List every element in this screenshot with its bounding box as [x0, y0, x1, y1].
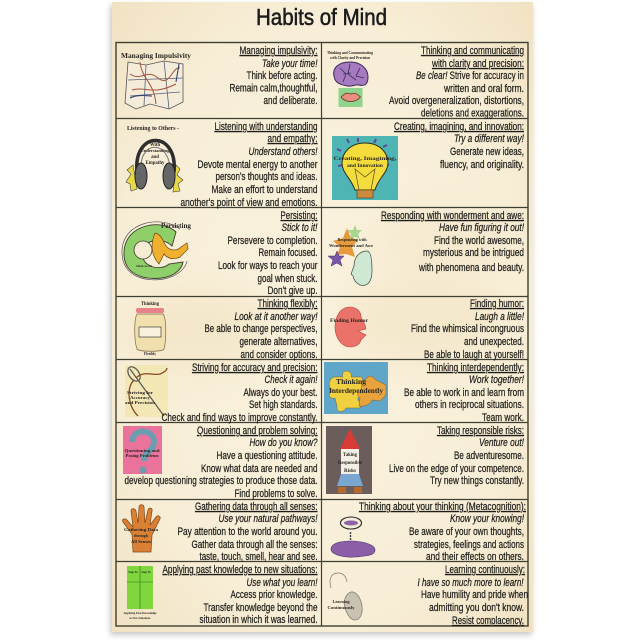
text: striving for accuracy: Check and find ways to improve constantly.: [162, 412, 318, 424]
text: managing impulsivity: [230, 45, 318, 107]
text: applying past knowledge: Transfer knowledge beyond the: [204, 602, 318, 614]
text: striving for accuracy: Check it again!: [264, 374, 318, 386]
text: finding humor: and unexpected.: [464, 336, 524, 348]
text: persisting: Persisting:: [280, 210, 318, 222]
icon: stars and face: [328, 225, 373, 285]
icon: head outline: Continuously: [328, 605, 355, 610]
icon: question mark: [123, 426, 162, 474]
text: persisting: Look for ways to reach your: [218, 260, 318, 272]
text: creating, imagining, innovation: Generate new ideas,: [450, 146, 524, 158]
text: listening with understanding: Devote mental energy to another: [198, 159, 318, 171]
text: gathering data: Use your natural pathways!: [218, 513, 318, 525]
text: learning continuously: Learning continuously:: [445, 564, 525, 576]
icon: rocket: Responsible: [338, 461, 362, 466]
icon: rocket: [326, 426, 372, 494]
text: striving for accuracy: Striving for accuracy and precision:: [192, 362, 318, 374]
text: taking responsible risks: Taking responsible risks:: [437, 425, 524, 437]
icon: hand: [122, 505, 160, 552]
text: finding humor: Laugh a little!: [475, 311, 524, 323]
icon: headphones: and: [151, 155, 159, 160]
text: thinking and communicating: with clarity and precision:: [431, 58, 524, 70]
text: managing impulsivity: and deliberate.: [264, 95, 318, 107]
icon: laughing face: [330, 307, 369, 347]
panel: listening with understanding: [126, 121, 318, 209]
text: applying past knowledge: situation in which it was learned.: [200, 614, 318, 626]
text: thinking flexibly: generate alternatives,: [240, 336, 318, 348]
text: managing impulsivity: Managing impulsivity:: [240, 45, 318, 57]
text: responding with wonderment: Responding with wonderment and awe:: [381, 210, 524, 222]
text: gathering data: Gathering data through all senses:: [195, 501, 318, 513]
icon: headphones: Listening to Others -: [127, 126, 179, 132]
icon: laughing face: Finding Humor: [330, 319, 369, 324]
icon: green tape roll: Persisting: [161, 222, 191, 230]
text: managing impulsivity: Remain calm,thoughtful,: [230, 82, 318, 94]
text: thinking interdependently: Thinking interdependently:: [427, 362, 524, 374]
text: applying past knowledge: Access prior knowledge.: [230, 589, 318, 601]
icon: headphones: Empathy: [146, 161, 165, 166]
panel: persisting: [122, 210, 318, 297]
text: listening with understanding: and empathy:: [268, 133, 318, 145]
text: striving for accuracy: [162, 362, 318, 424]
text: thinking flexibly: [204, 298, 318, 361]
icon: green T-chart: Step To: [128, 570, 138, 574]
text: managing impulsivity: Think before acting.: [246, 70, 318, 82]
text: learning continuously: I have so much more to learn!: [418, 577, 524, 589]
text: persisting: Don't give up.: [268, 285, 318, 297]
text: thinking interdependently: Be able to work in and learn from: [404, 387, 524, 399]
text: questioning: Know what data are needed and: [201, 463, 318, 475]
text: metacognition: and their effects on others.: [426, 551, 524, 563]
text: thinking interdependently: [404, 362, 524, 424]
icon: rocket: Risks: [344, 469, 356, 474]
icon: light bulb: and Innovation: [347, 163, 383, 169]
icon: headphones: With: [150, 143, 160, 148]
icon: brain and lips: with Clarity and Precision: [330, 56, 370, 60]
icon: puzzle pieces: [324, 362, 388, 414]
text: responding with wonderment: Have fun figuring it out!: [439, 222, 524, 234]
text: persisting: Remain focused.: [258, 247, 318, 259]
text: thinking and communicating: written and oral form.: [443, 83, 524, 95]
text: metacognition: strategies, feelings and actions: [414, 539, 524, 551]
text: questioning: develop questioning strategies to produce those data.: [124, 475, 318, 487]
panel: managing impulsivity: [121, 45, 318, 109]
text: learning continuously: Resist complacency.: [452, 615, 524, 627]
text: responding with wonderment: Find the world awesome,: [434, 235, 524, 247]
text: thinking and communicating: Thinking and communicating: [421, 45, 524, 57]
text: finding humor: [411, 298, 524, 361]
icon: headphones: [126, 126, 183, 192]
icon: head outline: Learning: [332, 599, 350, 604]
icon: green T-chart: to New Situations: [130, 616, 151, 620]
text: persisting: Persevere to completion.: [228, 235, 318, 247]
text: gathering data: taste, touch, smell, hear and see.: [200, 551, 318, 563]
text: thinking and communicating: Be clear! Strive for accuracy in: [416, 70, 524, 82]
icon: question mark: Questioning and: [124, 449, 161, 453]
panel: questioning: [123, 425, 318, 500]
text: responding with wonderment: mysterious and be intrigued: [423, 247, 524, 259]
panel: thinking flexibly: [135, 298, 318, 361]
icon: jar: Flexibly: [144, 351, 157, 356]
text: finding humor: Finding humor:: [470, 298, 524, 310]
icon: hand: Gathering Data: [124, 527, 159, 532]
text: persisting: Stick to it!: [282, 222, 318, 234]
text: striving for accuracy: Set high standards.: [249, 399, 318, 411]
table grid: [116, 42, 528, 626]
icon: green T-chart: [124, 566, 157, 620]
text: questioning: [124, 425, 318, 500]
icon: jar: Thinking: [141, 302, 160, 307]
text: taking responsible risks: Venture out!: [479, 437, 524, 449]
icon: rocket: Taking: [343, 453, 358, 458]
text: thinking flexibly: Be able to change perspectives,: [204, 323, 318, 335]
text: metacognition: Know your knowing!: [450, 513, 524, 525]
icon: road map: [121, 53, 192, 109]
text: striving for accuracy: Always do your best.: [244, 387, 318, 399]
text: finding humor: Be able to laugh at yourself!: [424, 349, 524, 361]
text: creating, imagining, innovation: Creating, imagining, and innovation:: [394, 121, 524, 133]
text: taking responsible risks: Be adventuresome.: [454, 450, 524, 462]
icon: head outline: [328, 573, 362, 620]
panel: learning continuously: [328, 564, 528, 627]
icon: needle and thread: [125, 365, 168, 417]
text: thinking and communicating: [389, 45, 524, 120]
text: thinking flexibly: and consider options.: [240, 349, 318, 361]
text: questioning: Questioning and problem solving:: [197, 425, 318, 437]
icon: hand: All Senses: [131, 539, 151, 544]
icon: puzzle pieces: Interdependently: [329, 388, 384, 395]
icon: road map: Managing Impulsivity: [121, 53, 192, 60]
text: gathering data: Gather data through all the senses:: [192, 539, 318, 551]
text: taking responsible risks: [389, 425, 524, 487]
icon: question mark: Posing Problems: [126, 454, 159, 458]
text: managing impulsivity: Take your time!: [262, 58, 318, 70]
icon: thought bubble and brain: [331, 517, 375, 557]
text: applying past knowledge: Use what you learn!: [246, 577, 318, 589]
icon: green T-chart: Step To: [141, 570, 151, 574]
text: thinking interdependently: others in reciprocal situations.: [415, 399, 524, 411]
icon: green tape roll: Stick to It!: [136, 264, 152, 268]
text: questioning: Have a questioning attitude.: [216, 450, 318, 462]
text: listening with understanding: Listening with understanding: [214, 121, 318, 133]
text: persisting: goal when stuck.: [258, 273, 318, 285]
icon: needle and thread: and Precision: [125, 401, 156, 405]
icon: puzzle pieces: Thinking: [336, 378, 367, 386]
icon: hand: through: [134, 533, 148, 538]
poster sheet: [110, 2, 533, 635]
panel: taking responsible risks: [326, 425, 524, 494]
icon: brain and lips: [327, 51, 373, 107]
text: responding with wonderment: [381, 210, 524, 274]
panel: responding with wonderment: [328, 210, 524, 285]
text: learning continuously: [418, 564, 528, 627]
text: thinking and communicating: deletions and exaggerations.: [421, 108, 524, 120]
text: thinking and communicating: Avoid overgeneralization, distortions,: [389, 95, 524, 107]
text: questioning: How do you know?: [250, 437, 318, 449]
title: Habits of Mind: [256, 4, 387, 30]
text: thinking interdependently: Work together!: [469, 374, 524, 386]
icon: headphones: Understanding: [141, 148, 170, 153]
text: creating, imagining, innovation: Try a different way!: [454, 133, 524, 145]
text: persisting: [218, 210, 318, 297]
text: metacognition: Be aware of your own thoughts,: [409, 526, 524, 538]
text: learning continuously: admitting you don't know.: [429, 602, 524, 614]
text: listening with understanding: person's thoughts and ideas.: [216, 171, 318, 183]
text: listening with understanding: another's point of view and emotions.: [180, 197, 318, 209]
icon: green T-chart: Applying Past Knowledge: [124, 611, 157, 615]
panel: applying past knowledge: [124, 564, 318, 626]
text: listening with understanding: Make an effort to understand: [212, 184, 318, 196]
text: metacognition: Thinking about your thinking (Metacognition):: [359, 501, 526, 513]
text: applying past knowledge: Applying past knowledge to new situations:: [162, 564, 318, 576]
text: thinking interdependently: Team work.: [482, 412, 524, 424]
panel: thinking and communicating: [327, 45, 524, 120]
text: taking responsible risks: Try new things constantly.: [430, 475, 524, 487]
icon: needle and thread: Accuracy: [130, 396, 150, 400]
text: questioning: Find problems to solve.: [234, 488, 318, 500]
icon: light bulb: [332, 136, 398, 200]
text: listening with understanding: [180, 121, 318, 209]
panel: striving for accuracy: [125, 362, 318, 424]
icon: stars and face: Wonderment and Awe: [329, 243, 373, 248]
text: creating, imagining, innovation: [394, 121, 524, 171]
icon: stars and face: Responding with: [338, 237, 367, 242]
text: learning continuously: Have humility and pride when: [421, 589, 528, 601]
text: applying past knowledge: [162, 564, 318, 626]
panel: thinking interdependently: [324, 362, 524, 424]
icon: green tape roll: [122, 222, 191, 280]
panel: metacognition: [331, 501, 526, 563]
text: finding humor: Find the whimsical incongruous: [411, 323, 524, 335]
icon: light bulb: Creating, Imagining,: [334, 156, 397, 162]
text: listening with understanding: Understand others!: [248, 146, 318, 158]
icon: needle and thread: Striving for: [127, 391, 153, 395]
panel: finding humor: [330, 298, 524, 361]
text: creating, imagining, innovation: fluency, and originality.: [440, 159, 524, 171]
text: gathering data: [178, 501, 318, 563]
icon: brain and lips: Thinking and Communicating: [327, 51, 373, 55]
panel: creating, imagining, innovation: [332, 121, 524, 200]
text: thinking flexibly: Look at it another way!: [234, 311, 318, 323]
panel: gathering data: [122, 501, 318, 563]
text: responding with wonderment: with phenomena and beauty.: [418, 262, 524, 274]
text: thinking flexibly: Thinking flexibly:: [258, 298, 318, 310]
icon: jar: [135, 302, 166, 356]
text: taking responsible risks: Live on the edge of your competence.: [389, 463, 524, 475]
text: gathering data: Pay attention to the world around you.: [178, 526, 318, 538]
text: metacognition: [359, 501, 526, 563]
